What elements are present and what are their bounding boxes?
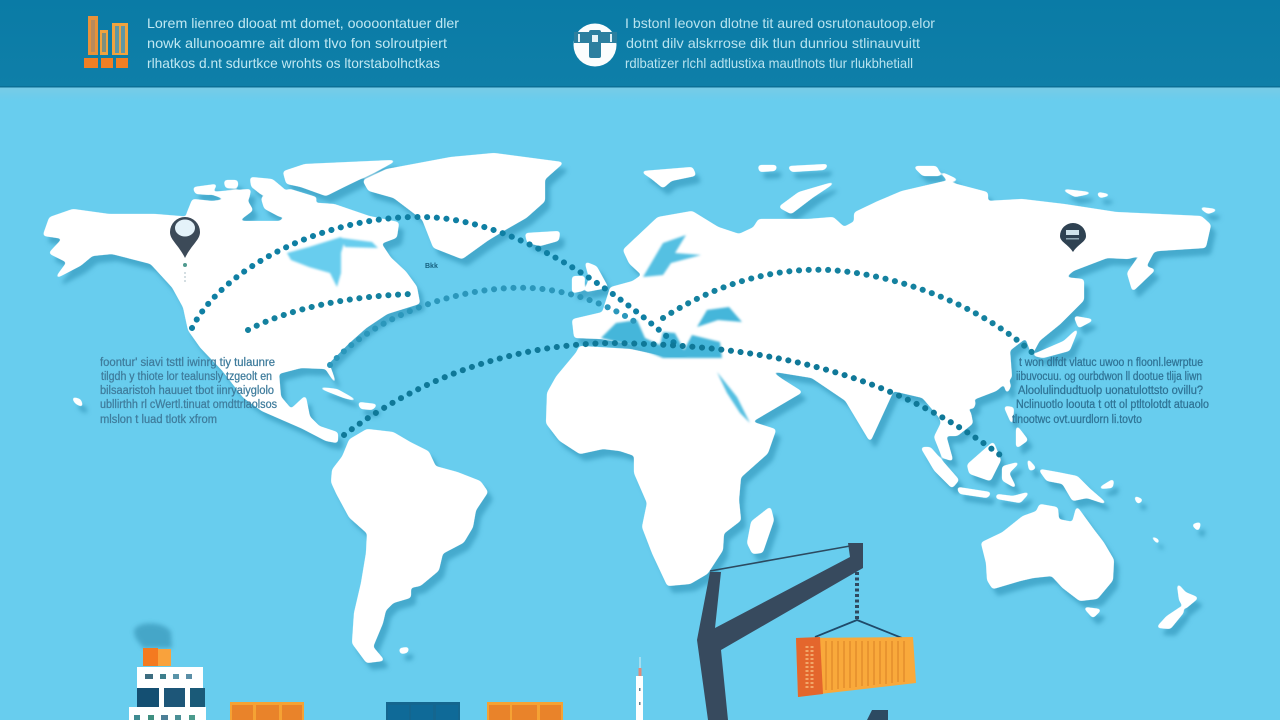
sea: Mediterranean	[601, 320, 722, 358]
route: Mediterranean to Japan	[663, 270, 1035, 355]
land: Tasmania and New Zealand	[1085, 585, 1197, 628]
land: Eurasia	[573, 182, 1210, 460]
text block: left: bilsaaristoh hauuet tbot iinryaiyglolo	[100, 385, 274, 397]
land: Falkland	[400, 648, 408, 653]
text block: left: ubllirthh rl cWertl.tinuat omdttrlaolsos	[100, 399, 277, 411]
land: Sakhalin and Japan	[1034, 250, 1154, 357]
land: Iceland	[526, 232, 559, 245]
hanging container	[796, 637, 916, 697]
tiny map label: Bkk	[425, 263, 438, 270]
map pin: North America	[170, 217, 200, 282]
land: arctic islands	[187, 161, 394, 220]
shipping routes	[192, 217, 1035, 455]
header text right: dotnt dilv alskrrose dik tlun dunriou stlinauvuitt	[626, 35, 920, 51]
crane cable	[710, 546, 850, 571]
route: Panama to Southeast Asia	[344, 343, 1000, 455]
text block: right	[1012, 357, 1209, 426]
text block: right: Aloolulindudtuolp uonatulottsto ovillu?	[1018, 385, 1203, 397]
sea: Hudson Bay	[287, 237, 344, 287]
second crane base	[867, 710, 888, 720]
ship	[129, 623, 206, 720]
land: Cuba and Hispaniola	[321, 388, 376, 409]
ship funnel	[143, 648, 171, 666]
header text right: rdlbatizer rlchl adtlustixa mautlnots tlur rlukbhetiall	[625, 55, 913, 71]
header text left: Lorem lienreo dlooat mt domet, ooooontatuer dler	[147, 15, 459, 31]
map pin: East Asia	[1060, 223, 1086, 252]
route: Florida to Europe	[330, 288, 640, 365]
land masses	[44, 154, 1216, 662]
ship smoke	[134, 623, 172, 648]
sea: Red Sea	[717, 372, 750, 423]
crane slings	[815, 620, 902, 638]
ship lower deck	[129, 707, 206, 720]
text block: left: tilgdh y thiote lor tealunsly tzgeolt en	[101, 371, 272, 383]
land: Southeast Asia islands	[922, 380, 1200, 543]
header text left: rlhatkos d.nt sdurtkce wrohts os ltorstabolhctkas	[147, 55, 440, 71]
text block: right: t won dlfdt vlatuc uwoo n floonl.lewrptue	[1019, 357, 1203, 369]
distant tower	[636, 657, 643, 720]
header text right: I bstonl leovon dlotne tit aured osrutonautoop.elor	[625, 15, 935, 31]
land: Madagascar	[748, 508, 773, 553]
header text right	[625, 15, 935, 71]
text block: right: Nclinuotlo loouta t ott ol ptltolotdt atuaolo	[1016, 399, 1209, 411]
header text left: nowk allunooamre ait dlom tlvo fon solroutpiert	[147, 35, 447, 51]
sea: Hudson Strait	[341, 238, 378, 248]
ship upper deck	[137, 667, 203, 688]
text block: left: foontur' siavi tsttl iwinrg tiy tulaunre	[100, 357, 275, 369]
land: polar islands	[643, 165, 1216, 213]
crane frame	[697, 543, 863, 720]
inland seas	[287, 235, 750, 423]
land: Greenland	[364, 154, 562, 258]
land: Britain and Ireland	[573, 263, 607, 292]
text block: right: iibuvocuu. og ourbdwon ll dootue tlija liwn	[1016, 371, 1202, 383]
land: Africa and Arabia	[547, 347, 801, 585]
land: Hawaii	[73, 398, 82, 406]
text block: left: mlslon t luad tlotk xfrom	[100, 414, 217, 426]
container: orange right	[487, 702, 563, 720]
header band	[0, 0, 1280, 88]
world map	[44, 154, 1216, 662]
container: orange left	[230, 702, 304, 720]
sea: Baltic	[643, 235, 701, 277]
text block: left	[100, 357, 277, 426]
icon: satellite badge	[574, 24, 617, 66]
land: South America	[332, 430, 487, 662]
header text left	[147, 15, 459, 71]
ship bridge windows	[137, 688, 205, 707]
text block: right: tlnootwc ovt.uurdlorn li.tovto	[1012, 414, 1142, 426]
container: blue	[386, 702, 460, 720]
route: US interior to east coast	[248, 294, 412, 330]
route: west coast to Europe	[192, 217, 680, 348]
sea: Black Sea	[697, 307, 742, 327]
crane chain	[855, 572, 859, 619]
icon: bar chart books	[84, 16, 128, 68]
land: North America	[44, 203, 419, 442]
land: Australia	[982, 505, 1113, 600]
crane	[697, 543, 916, 720]
